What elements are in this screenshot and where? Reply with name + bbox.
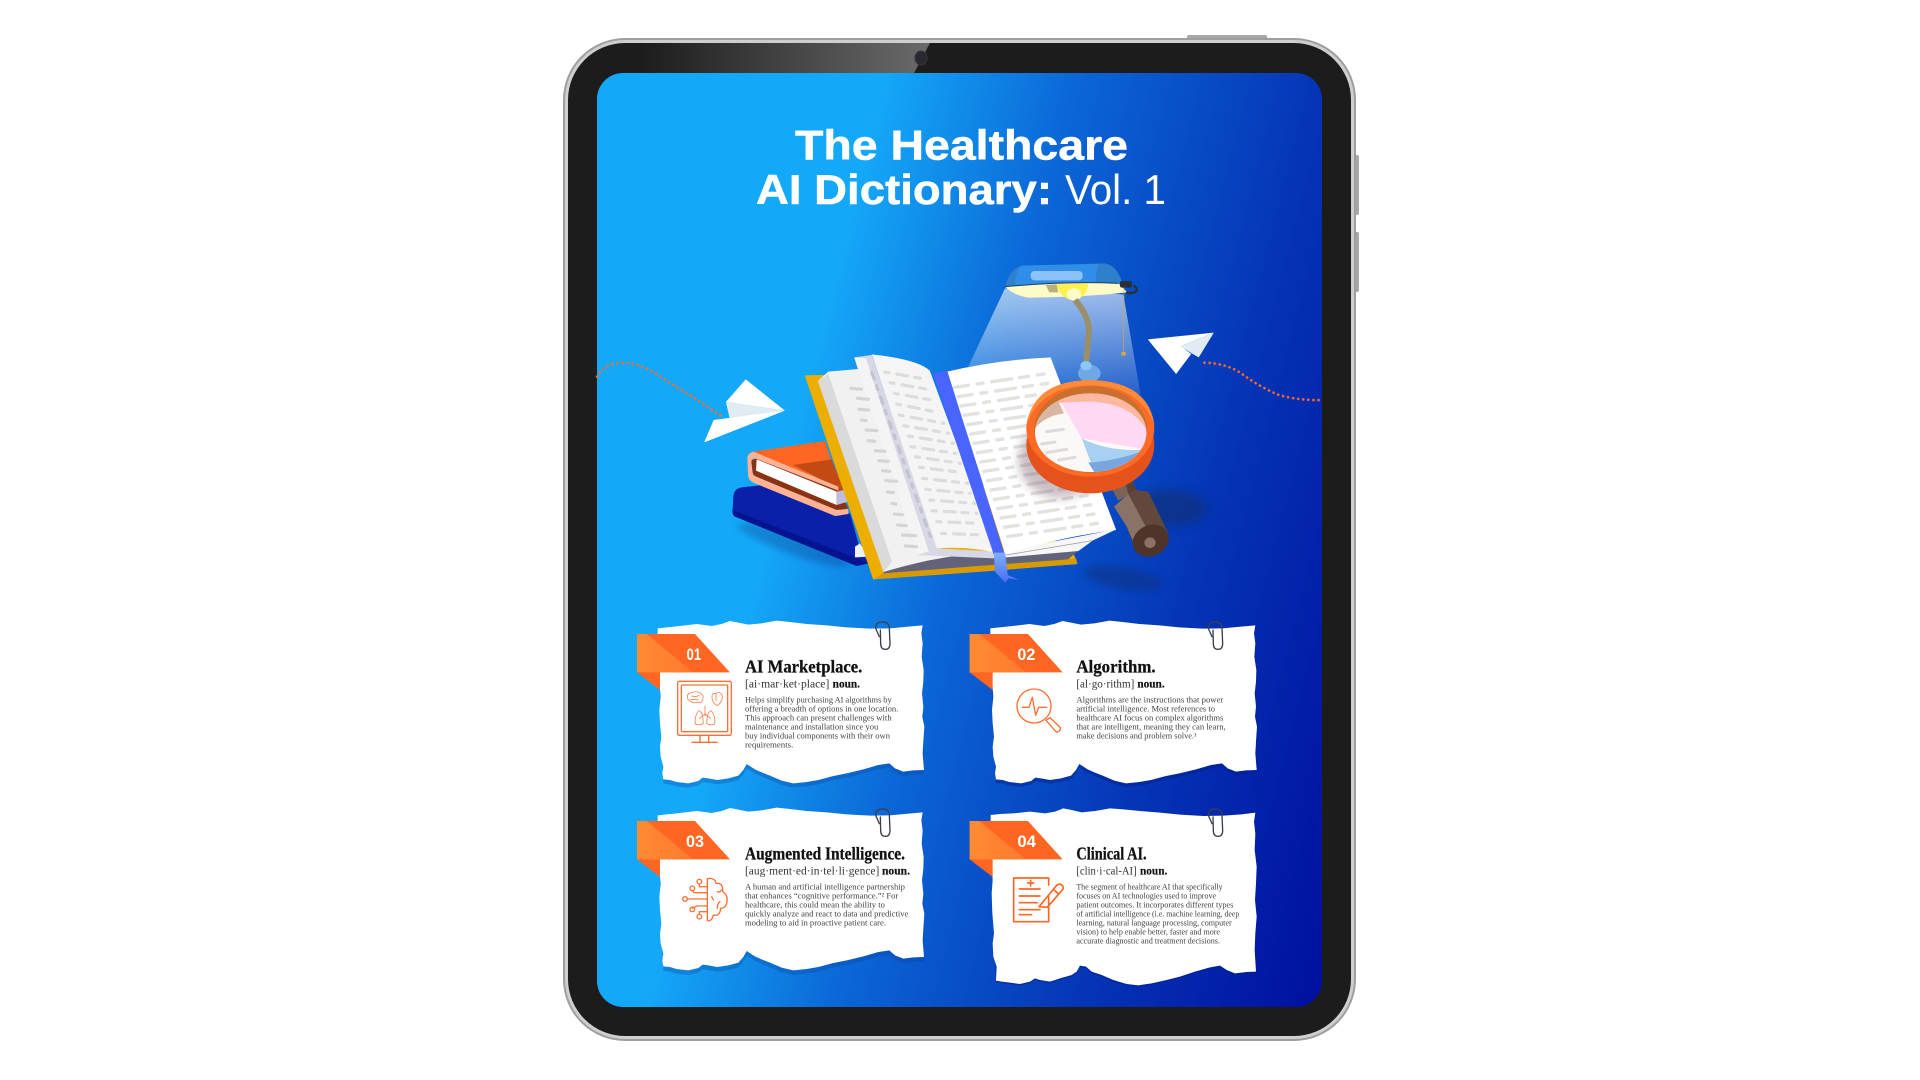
lamp base	[1078, 365, 1101, 382]
icon: clinical notes and pencil	[1014, 878, 1063, 922]
number ribbon	[970, 821, 1063, 877]
icon: brain circuit	[683, 878, 727, 921]
number ribbon: 04	[1017, 832, 1037, 851]
definition text: noun.	[1140, 865, 1167, 877]
number ribbon: 03	[686, 832, 704, 851]
definition text: that are intelligent, meaning they can learn,	[1076, 722, 1226, 731]
definition text: vision) to help enable better, faster and more	[1076, 927, 1220, 936]
torn paper	[990, 621, 1257, 783]
definition text: requirements.	[745, 740, 793, 749]
definition text: [ai·mar·ket·place]	[745, 678, 829, 690]
definition text: patient outcomes. It incorporates different types	[1076, 901, 1233, 910]
torn paper shadow	[993, 882, 1256, 987]
paper clip	[876, 809, 890, 836]
camera	[915, 51, 927, 65]
torn paper shadow	[660, 864, 924, 975]
card 01: AI Marketplace	[637, 621, 924, 788]
definition text	[1076, 843, 1239, 945]
card 02: Algorithm	[970, 621, 1257, 787]
paper plane left	[704, 379, 785, 442]
number ribbon: 02	[1017, 645, 1035, 664]
number ribbon: 01	[687, 645, 701, 664]
stacked left sheets	[854, 355, 996, 558]
flight paths and paper planes	[597, 333, 1321, 442]
number ribbon	[637, 634, 730, 690]
card 04: Clinical AI	[970, 808, 1257, 987]
page text dashes	[851, 372, 1097, 547]
definition text: Algorithm.	[1076, 656, 1156, 676]
stack of books	[732, 441, 868, 566]
definition text	[1076, 656, 1226, 740]
tablet infographic	[563, 35, 1359, 1041]
lamp underside	[1005, 283, 1127, 298]
orange book	[753, 441, 843, 487]
definition text: A human and artificial intelligence partnership	[745, 883, 905, 892]
definition text: [clin·i·cal-AI]	[1076, 865, 1137, 877]
orange rim	[1026, 397, 1154, 493]
definition text: artificial intelligence. Most references to	[1076, 705, 1215, 714]
bulb	[1057, 284, 1088, 300]
torn paper	[658, 621, 924, 783]
top left page	[872, 354, 996, 553]
definition text: This approach can present challenges with	[745, 714, 893, 723]
paper clip	[1208, 622, 1223, 649]
open book	[805, 354, 1116, 583]
icon: magnifier with pulse	[1017, 689, 1060, 732]
screen background	[597, 73, 1322, 1007]
definition text: focuses on AI technologies used to improve	[1076, 892, 1216, 901]
definition text: modeling to aid in proactive patient care.	[745, 918, 886, 927]
lens	[1033, 392, 1148, 475]
tablet frame	[563, 35, 1359, 1041]
definition text	[745, 843, 910, 927]
definition text: [al·go·rithm]	[1076, 678, 1134, 690]
title: Vol. 1	[1065, 166, 1166, 213]
definition text: learning, natural language processing, computer	[1076, 918, 1232, 927]
hero illustration: open book, lamp, magnifier	[597, 263, 1321, 596]
definition text: AI Marketplace.	[745, 656, 862, 676]
definition text: that enhances “cognitive performance.”² For	[745, 892, 899, 901]
left page block	[818, 369, 996, 572]
blue book	[732, 485, 868, 566]
card 03: Augmented Intelligence	[637, 808, 924, 975]
definition text	[745, 656, 898, 749]
definition text: buy individual components with their own	[745, 731, 891, 740]
paper clip	[876, 622, 890, 649]
bezel glare	[640, 43, 930, 73]
definition text: offering a breadth of options in one location.	[745, 705, 898, 714]
torn paper	[658, 808, 924, 970]
dotted flight path right	[1204, 363, 1321, 400]
blue ribbon	[933, 371, 1005, 558]
lamp knob	[1126, 286, 1137, 293]
title: The Healthcare	[795, 122, 1128, 168]
dotted flight path left	[597, 363, 723, 417]
magnifying glass	[1018, 380, 1174, 562]
definition text: Algorithms are the instructions that power	[1076, 696, 1224, 705]
lamp	[967, 263, 1141, 395]
torn paper shadow	[660, 677, 924, 788]
book cover	[805, 375, 1077, 579]
black bezel	[568, 43, 1351, 1036]
light cone	[967, 288, 1141, 395]
page edge underside	[884, 551, 1078, 573]
paper clip	[1208, 809, 1223, 836]
definition text: maintenance and installation since you	[745, 722, 879, 731]
icon: monitor with organs	[678, 681, 731, 742]
right under sheets	[996, 529, 1116, 557]
definition text: The segment of healthcare AI that specifically	[1076, 883, 1223, 892]
number ribbon	[970, 634, 1063, 690]
ground shadows	[733, 490, 1208, 596]
definition text: noun.	[833, 678, 860, 690]
definition text: make decisions and problem solve.¹	[1076, 731, 1197, 740]
handle	[1111, 477, 1137, 501]
definition text: Augmented Intelligence.	[745, 843, 905, 863]
definition text: quickly analyze and react to data and predictive	[745, 909, 909, 918]
lamp neck	[1075, 300, 1089, 363]
glass drop shadow	[1018, 422, 1102, 498]
title: AI Dictionary:	[756, 166, 1052, 213]
definition text: [aug·ment·ed·in·tel·li·gence]	[745, 865, 879, 877]
silver outer edge	[563, 38, 1356, 1041]
torn paper shadow	[993, 676, 1257, 787]
paper plane right	[1148, 333, 1214, 374]
definition text: healthcare AI focus on complex algorithms	[1076, 713, 1223, 722]
lamp shade	[1005, 263, 1123, 288]
torn paper	[991, 808, 1257, 985]
definition text: noun.	[882, 865, 910, 877]
definition text: of artificial intelligence (i.e. machine learning, deep	[1076, 910, 1239, 919]
pull chain	[1122, 288, 1125, 352]
definition text: Clinical AI.	[1076, 843, 1147, 863]
side and top buttons	[1187, 35, 1359, 292]
number ribbon	[637, 821, 730, 877]
definition text: accurate diagnostic and treatment decisions.	[1076, 936, 1220, 945]
definition text: noun.	[1137, 678, 1165, 690]
right page	[947, 357, 1116, 554]
title	[756, 122, 1166, 213]
definition text: healthcare, this could mean the ability to	[745, 901, 885, 910]
definition text: Helps simplify purchasing AI algorithms by	[745, 696, 893, 705]
